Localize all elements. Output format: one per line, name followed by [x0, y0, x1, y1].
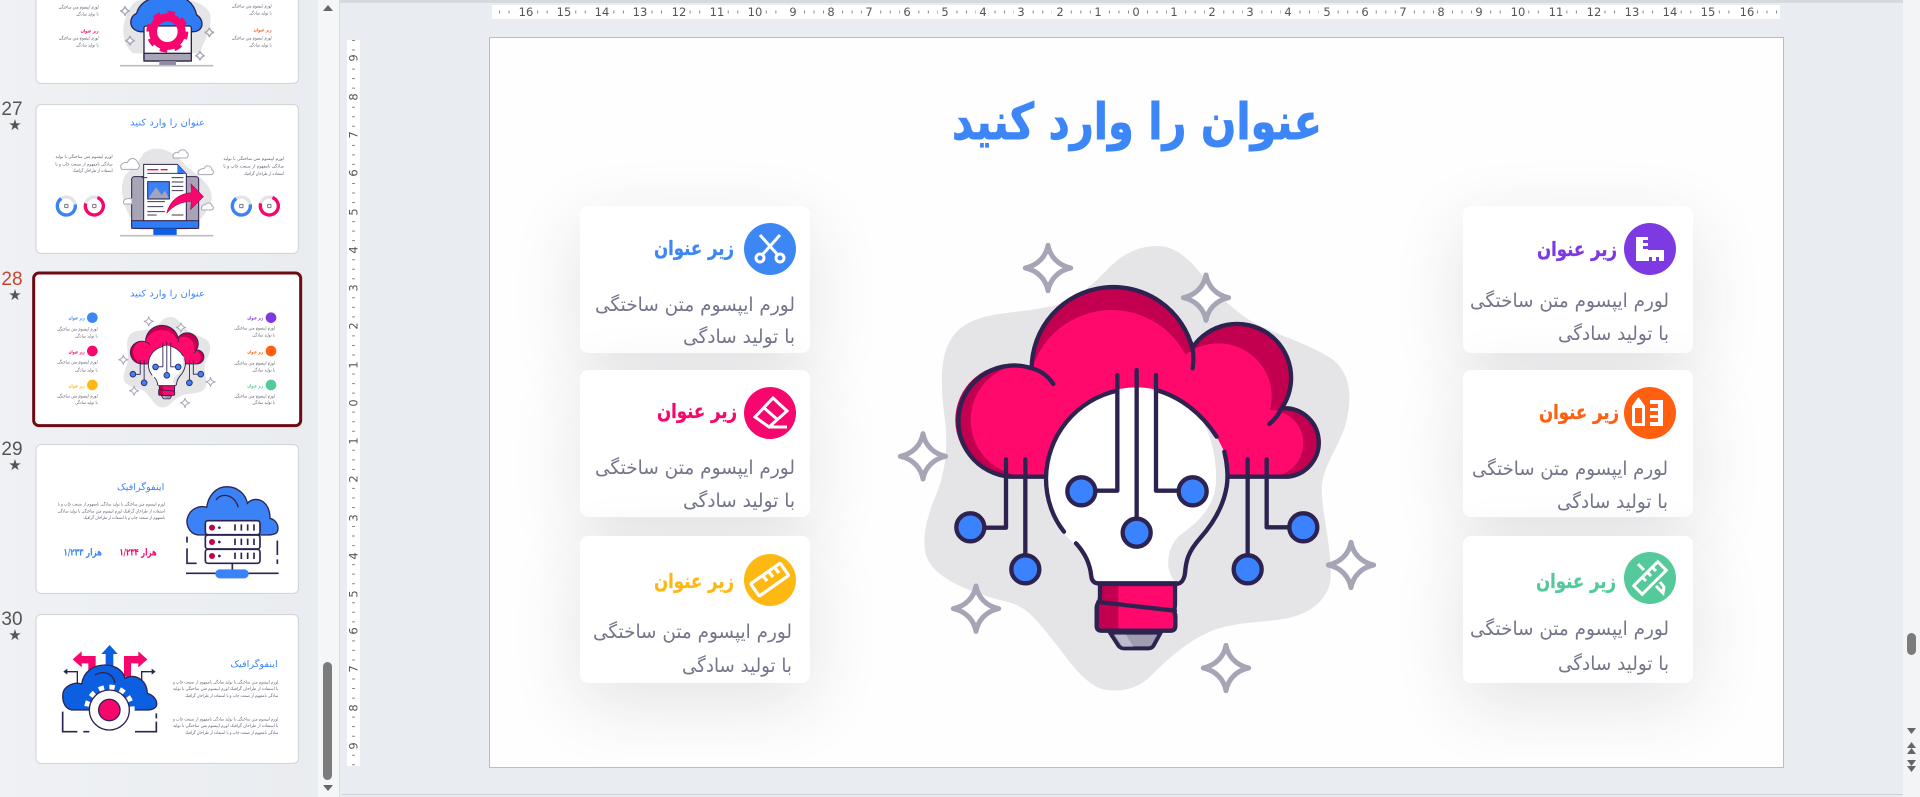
- thumbnail 26: با تولید سادگی: [76, 42, 99, 49]
- cloud: [955, 287, 1319, 477]
- thumbnail 29: استفاده از طراحان گرافیک لورم ایپسوم متن ساختگی با تولید سادگی: [58, 508, 165, 514]
- icon: pencil and ruler: [1624, 387, 1676, 439]
- thumbnail 29: اینفوگرافیک: [117, 481, 164, 493]
- body text: با تولید سادگی: [1558, 322, 1669, 345]
- top ruler: 14: [1663, 5, 1677, 19]
- top ruler: 7: [865, 5, 873, 19]
- top ruler: 8: [827, 5, 835, 19]
- slide number 29: 29: [1, 439, 23, 460]
- panel scrollbar thumb: [323, 662, 332, 780]
- bulb socket: [1097, 584, 1175, 648]
- thumbnail 30: با استفاده از طراحان گرافیک لورم ایپسوم متن ساختگی با تولید: [173, 686, 278, 692]
- top ruler: 12: [1587, 5, 1601, 19]
- vertical ruler: 8: [346, 93, 360, 101]
- vertical ruler: 1: [346, 437, 360, 445]
- body text: [1470, 289, 1669, 345]
- body text: با تولید سادگی: [683, 325, 795, 348]
- vertical ruler: 0: [346, 399, 360, 407]
- thumbnail 28 selected: با تولید سادگی: [252, 399, 275, 406]
- thumbnail 26: با تولید سادگی: [76, 11, 99, 18]
- top ruler: 9: [1475, 5, 1483, 19]
- panel: slide: [490, 38, 1783, 767]
- panel scroll up arrow: [323, 5, 333, 11]
- thumbnail 27: استفاده از طراحان گرافیک: [244, 171, 284, 177]
- thumbnail 28 selected: لورم ایپسوم متن ساختگی: [234, 360, 275, 367]
- circuit lines and nodes: [956, 370, 1317, 583]
- thumbnail 29: ۱/۲۳۳ هزار: [63, 547, 102, 558]
- top ruler: 2: [1208, 5, 1216, 19]
- top ruler: 13: [633, 5, 647, 19]
- background blob: [924, 246, 1349, 691]
- body text: لورم ایپسوم متن ساختگی: [595, 456, 795, 479]
- thumbnail 30: اینفوگرافیک: [230, 658, 278, 670]
- body text: با تولید سادگی: [682, 654, 792, 677]
- thumbnail 28 selected: [34, 273, 301, 426]
- top ruler: 14: [595, 5, 609, 19]
- body text: با تولید سادگی: [683, 489, 795, 512]
- card: right 1 set square: [1463, 206, 1693, 353]
- vertical ruler: 5: [346, 208, 360, 216]
- right scrollbar controls: [1907, 633, 1916, 772]
- top ruler: 16: [519, 5, 533, 19]
- sidebar background: [0, 0, 318, 797]
- icon: eraser: [744, 387, 796, 439]
- thumbnail 30: لورم ایپسوم متن ساختگی با تولید سادگی نامفهوم از صنعت چاپ و: [172, 716, 278, 722]
- thumbnail 26: زیر عنوان: [254, 27, 272, 33]
- central illustration: cloud light bulb: [898, 242, 1376, 694]
- top ruler: 15: [557, 5, 571, 19]
- top ruler: 12: [672, 5, 686, 19]
- icon: ruler: [744, 554, 796, 606]
- thumbnail 28 selected: لورم ایپسوم متن ساختگی: [57, 392, 98, 399]
- body text: با تولید سادگی: [1558, 652, 1669, 675]
- icon: crossed ruler and pencil: [1624, 552, 1676, 604]
- thumbnail 28 selected: لورم ایپسوم متن ساختگی: [57, 359, 98, 366]
- top ruler: 5: [941, 5, 949, 19]
- star 30: ★: [8, 626, 22, 644]
- top ruler: 4: [979, 5, 987, 19]
- thumbnail 28 selected: زیر عنوان: [69, 316, 85, 322]
- panel scroll down arrow: [323, 785, 333, 791]
- top ruler: 8: [1437, 5, 1445, 19]
- thumbnail 27: سادگی نامفهوم از صنعت چاپ و با: [55, 161, 113, 167]
- top ruler: 10: [1511, 5, 1525, 19]
- thumbnail 28 selected: با تولید سادگی: [252, 366, 275, 373]
- light bulb: [1046, 387, 1227, 584]
- star 27: ★: [8, 116, 22, 134]
- top ruler: 6: [903, 5, 911, 19]
- bottom edge line: [342, 794, 1903, 795]
- slide number 30: 30: [1, 609, 23, 630]
- top ruler: [492, 5, 1780, 19]
- top ruler: 1: [1094, 5, 1102, 19]
- vertical ruler: 7: [346, 665, 360, 673]
- subheading: زیر عنوان: [657, 399, 737, 423]
- thumbnail 26: لورم ایپسوم متن ساختگی: [59, 34, 99, 41]
- vertical ruler: 4: [346, 246, 360, 254]
- thumbnail 28 selected: با تولید سادگی: [75, 366, 98, 373]
- thumbnail 28 selected: زیر عنوان: [247, 349, 264, 355]
- title: عنوان را وارد کنید: [952, 93, 1322, 152]
- thumbnail 28 selected: لورم ایپسوم متن ساختگی: [57, 325, 98, 332]
- slide number 27: 27: [1, 99, 23, 120]
- card: left 3 ruler: [580, 536, 810, 683]
- thumbnail 29: نامفهوم از صنعت چاپ و با استفاده از طراحان گرافیک: [83, 515, 165, 521]
- thumbnail 29: ۱/۲۳۴ هزار: [119, 547, 157, 558]
- thumbnail 27: [36, 105, 298, 253]
- body text: لورم ایپسوم متن ساختگی: [1470, 617, 1669, 640]
- thumbnail 28 selected: زیر عنوان: [69, 349, 85, 355]
- thumbnail 28 selected: زیر عنوان: [247, 383, 264, 389]
- right scrollbar track: [1903, 0, 1920, 797]
- body text: [593, 620, 792, 677]
- top ruler: 0: [1132, 5, 1140, 19]
- vertical ruler: 2: [346, 475, 360, 483]
- top ruler: 10: [748, 5, 762, 19]
- body text: لورم ایپسوم متن ساختگی: [595, 293, 795, 316]
- thumbnail 29: [36, 445, 298, 593]
- vertical ruler: 4: [346, 552, 360, 560]
- subheading: زیر عنوان: [654, 569, 734, 593]
- body text: لورم ایپسوم متن ساختگی: [1472, 457, 1668, 480]
- card: right 3 crossed tools: [1463, 536, 1693, 683]
- thumbnail 30: سادگی نامفهوم از صنعت چاپ و با استفاده از طراحان گرافیک: [185, 730, 279, 736]
- thumbnail 30: لورم ایپسوم متن ساختگی با تولید سادگی نامفهوم از صنعت چاپ و: [172, 679, 278, 685]
- icon: scissors: [744, 223, 796, 275]
- thumbnail 27: استفاده از طراحان گرافیک: [73, 168, 113, 174]
- thumbnail 26: لورم ایپسوم متن ساختگی: [232, 34, 272, 41]
- thumbnail 27: عنوان را وارد کنید: [130, 118, 205, 129]
- top ruler: 7: [1399, 5, 1407, 19]
- subheading: زیر عنوان: [1536, 569, 1616, 593]
- top ruler: 16: [1740, 5, 1754, 19]
- body text: [595, 456, 795, 512]
- body text: لورم ایپسوم متن ساختگی: [593, 620, 792, 643]
- thumbnail 26: [36, 0, 298, 83]
- vertical ruler: 6: [346, 169, 360, 177]
- thumbnail 28 selected: لورم ایپسوم متن ساختگی: [234, 325, 275, 332]
- vertical ruler: 5: [346, 590, 360, 598]
- star 29: ★: [8, 456, 22, 474]
- vertical ruler: 6: [346, 627, 360, 635]
- body text: لورم ایپسوم متن ساختگی: [1470, 289, 1669, 312]
- vertical ruler: 2: [346, 322, 360, 330]
- vertical ruler: 3: [346, 514, 360, 522]
- top window edge: [0, 0, 1920, 3]
- card: left 2 eraser: [580, 370, 810, 517]
- top ruler: 11: [1549, 5, 1563, 19]
- thumbnail 28 selected: لورم ایپسوم متن ساختگی: [234, 392, 275, 399]
- thumbnail 30: سادگی نامفهوم از صنعت چاپ و با استفاده از طراحان گرافیک: [185, 693, 279, 699]
- subheading: زیر عنوان: [654, 236, 734, 260]
- body text: [1470, 617, 1669, 675]
- sparkles: [900, 245, 1374, 691]
- thumbnail 30: [36, 615, 298, 763]
- star 28: ★: [8, 286, 22, 304]
- subheading: زیر عنوان: [1539, 400, 1619, 424]
- top ruler: 3: [1246, 5, 1254, 19]
- thumbnail 27: لورم ایپسوم متن ساختگی با تولید: [55, 154, 113, 160]
- thumbnail 26: با تولید سادگی: [249, 9, 272, 16]
- top ruler: 13: [1625, 5, 1639, 19]
- top ruler: 9: [789, 5, 797, 19]
- top ruler: 15: [1701, 5, 1715, 19]
- slide thumbnails panel: [1, 0, 333, 791]
- thumbnail 28 selected: زیر عنوان: [247, 316, 264, 322]
- thumbnail 26: با تولید سادگی: [249, 42, 272, 49]
- sidebar scroll track: [318, 0, 340, 797]
- thumbnail 26: لورم ایپسوم متن ساختگی: [59, 3, 99, 10]
- top ruler: 11: [710, 5, 724, 19]
- icon: L ruler: [1624, 223, 1676, 275]
- thumbnail 30: با استفاده از طراحان گرافیک لورم ایپسوم متن ساختگی با تولید: [173, 723, 278, 729]
- vertical ruler: 9: [346, 54, 360, 62]
- vertical ruler: 1: [346, 361, 360, 369]
- body text: [1472, 457, 1668, 513]
- thumbnail 28 selected: با تولید سادگی: [75, 333, 98, 340]
- vertical ruler: 9: [346, 742, 360, 750]
- thumbnail 27: سادگی نامفهوم از صنعت چاپ و با: [223, 164, 284, 170]
- top ruler: 6: [1361, 5, 1369, 19]
- vertical ruler: 8: [346, 704, 360, 712]
- thumbnail 28 selected: با تولید سادگی: [75, 399, 98, 406]
- vertical ruler: 7: [346, 131, 360, 139]
- top ruler: 4: [1284, 5, 1292, 19]
- vertical ruler: 3: [346, 284, 360, 292]
- card: right 2 pencil and ruler: [1463, 370, 1693, 517]
- top ruler: 5: [1323, 5, 1331, 19]
- slide number 28: 28: [1, 269, 23, 290]
- thumbnail 28 selected: زیر عنوان: [69, 383, 85, 389]
- top ruler: 2: [1056, 5, 1064, 19]
- vertical ruler: [346, 40, 360, 766]
- top ruler: 1: [1170, 5, 1178, 19]
- thumbnail 26: لورم ایپسوم متن ساختگی: [232, 2, 272, 9]
- thumbnail 26: زیر عنوان: [81, 28, 99, 34]
- top ruler: 3: [1017, 5, 1025, 19]
- thumbnail 27: لورم ایپسوم متن ساختگی با تولید: [223, 156, 284, 162]
- body text: [595, 293, 795, 348]
- thumbnail 28 selected: با تولید سادگی: [252, 331, 275, 338]
- thumbnail 28 selected: عنوان را وارد کنید: [130, 288, 205, 299]
- subheading: زیر عنوان: [1537, 237, 1617, 261]
- thumbnail 29: لورم ایپسوم متن ساختگی با تولید سادگی نامفهوم از صنعت چاپ و با: [58, 501, 165, 507]
- body text: با تولید سادگی: [1557, 490, 1668, 513]
- card: left 1 scissors: [580, 206, 810, 353]
